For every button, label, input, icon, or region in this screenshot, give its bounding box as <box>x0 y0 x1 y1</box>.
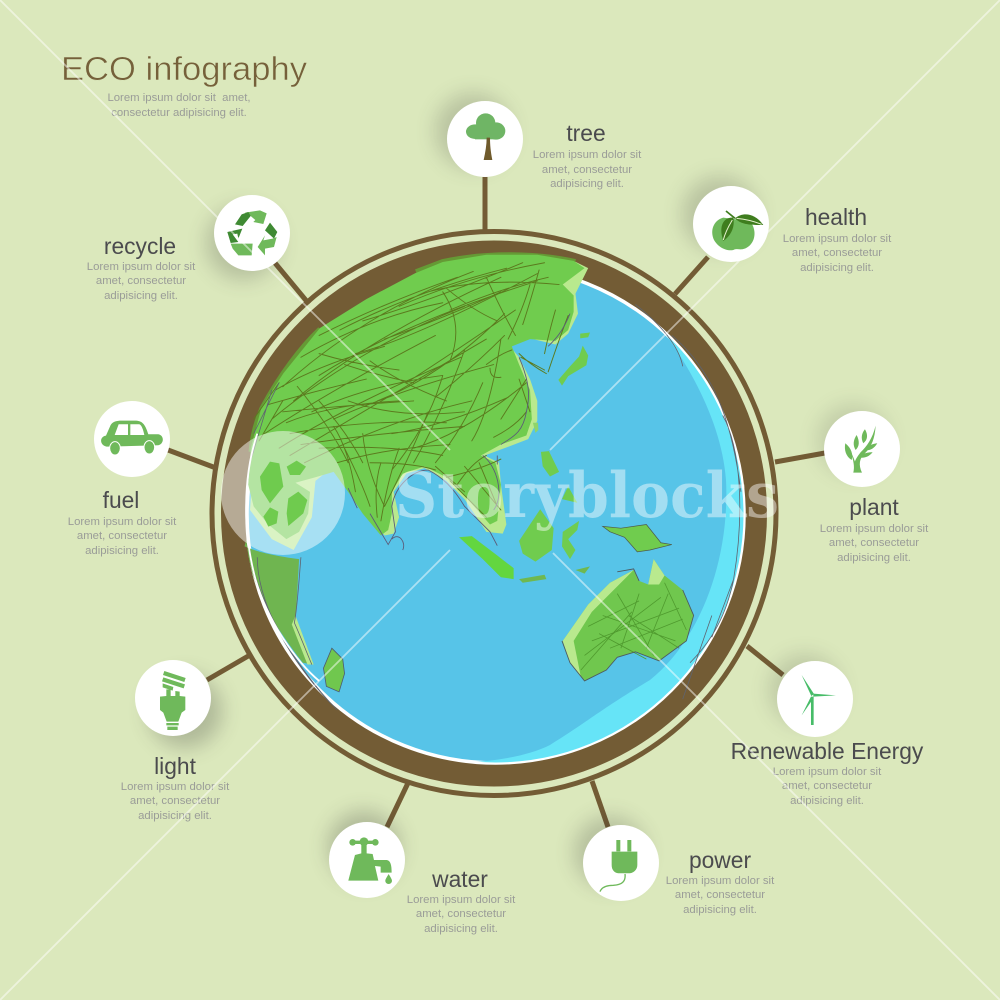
Java and small islands <box>519 566 590 583</box>
Australia <box>563 559 694 681</box>
label: renewable energy: Renewable Energy <box>731 738 924 764</box>
label: water: amet, consectetur <box>416 908 506 920</box>
label: health: health <box>805 204 867 230</box>
Philippines <box>541 451 577 503</box>
watermark logo S cut-outs <box>260 461 307 527</box>
New Guinea <box>603 525 672 552</box>
icon: recycle <box>206 195 290 280</box>
icon: wind turbine <box>769 654 853 737</box>
label: water: Lorem ipsum dolor sit <box>407 894 516 906</box>
globe with rings <box>212 232 780 796</box>
Japan <box>558 333 590 386</box>
watermark <box>221 431 779 555</box>
ocean highlight crescent <box>476 333 744 762</box>
label: recycle: amet, consectetur <box>96 275 186 287</box>
hatching <box>254 263 568 521</box>
label: tree: adipisicing elit. <box>550 178 624 190</box>
label: health: Lorem ipsum dolor sit <box>783 233 892 245</box>
label: fuel: fuel <box>103 487 139 513</box>
Asia dark rim <box>251 254 575 452</box>
label: water: water <box>431 866 488 892</box>
label: light: amet, consectetur <box>130 795 220 807</box>
label: plant: Lorem ipsum dolor sit <box>820 523 929 535</box>
label: power: adipisicing elit. <box>683 904 757 916</box>
watermark: Storyblocks <box>395 458 779 532</box>
Africa <box>245 539 314 665</box>
Asia pale coast <box>250 261 588 550</box>
label: power <box>666 847 775 916</box>
label: water <box>407 866 516 935</box>
label: fuel: Lorem ipsum dolor sit <box>68 516 177 528</box>
title subtext: consectetur adipisicing elit. <box>111 107 247 119</box>
label: renewable energy: Lorem ipsum dolor sit <box>773 766 882 778</box>
label: recycle: Lorem ipsum dolor sit <box>87 261 196 273</box>
label: health: adipisicing elit. <box>800 262 874 274</box>
title: ECO infography <box>61 50 308 87</box>
Sulawesi <box>562 521 579 559</box>
Asia main land <box>248 255 585 539</box>
label: health <box>783 204 892 274</box>
label: light: Lorem ipsum dolor sit <box>121 781 230 793</box>
Taiwan <box>533 423 538 433</box>
icon: tree <box>435 93 523 177</box>
label: tree: Lorem ipsum dolor sit <box>533 149 642 161</box>
label: plant <box>820 494 929 564</box>
label: plant: amet, consectetur <box>829 537 919 549</box>
land and sketch lines <box>245 254 741 710</box>
label: fuel: amet, consectetur <box>77 530 167 542</box>
icon: health apple <box>682 176 769 262</box>
rim sketch lines <box>250 305 741 710</box>
label: power: Lorem ipsum dolor sit <box>666 875 775 887</box>
icon: car <box>94 401 170 477</box>
label: power: amet, consectetur <box>675 889 765 901</box>
label: renewable energy: adipisicing elit. <box>790 795 864 807</box>
label: power: power <box>689 847 751 873</box>
icon: water tap <box>328 811 405 898</box>
icon: light bulb <box>135 660 222 748</box>
label: renewable energy <box>731 738 924 807</box>
label: recycle: adipisicing elit. <box>104 290 178 302</box>
icon: plant <box>817 404 900 487</box>
label: renewable energy: amet, consectetur <box>782 780 872 792</box>
icon: power plug <box>574 816 659 901</box>
label: light: light <box>154 753 197 779</box>
Asia coast ink <box>348 314 570 550</box>
label: recycle: recycle <box>104 233 176 259</box>
ocean <box>247 266 744 763</box>
label: tree: amet, consectetur <box>542 164 632 176</box>
label: water: adipisicing elit. <box>424 923 498 935</box>
label: tree: tree <box>566 120 606 146</box>
Madagascar <box>323 648 345 692</box>
label: light <box>121 753 230 822</box>
connector spokes <box>168 177 825 827</box>
Borneo <box>519 509 554 562</box>
label: plant: adipisicing elit. <box>837 552 911 564</box>
label: health: amet, consectetur <box>792 247 882 259</box>
label: plant: plant <box>849 494 899 520</box>
title subtext: Lorem ipsum dolor sit amet, <box>107 92 251 104</box>
label: light: adipisicing elit. <box>138 810 212 822</box>
label: recycle <box>87 233 196 302</box>
Sumatra <box>459 536 514 579</box>
label: fuel <box>68 487 177 557</box>
label: fuel: adipisicing elit. <box>85 545 159 557</box>
label: tree <box>533 120 642 190</box>
